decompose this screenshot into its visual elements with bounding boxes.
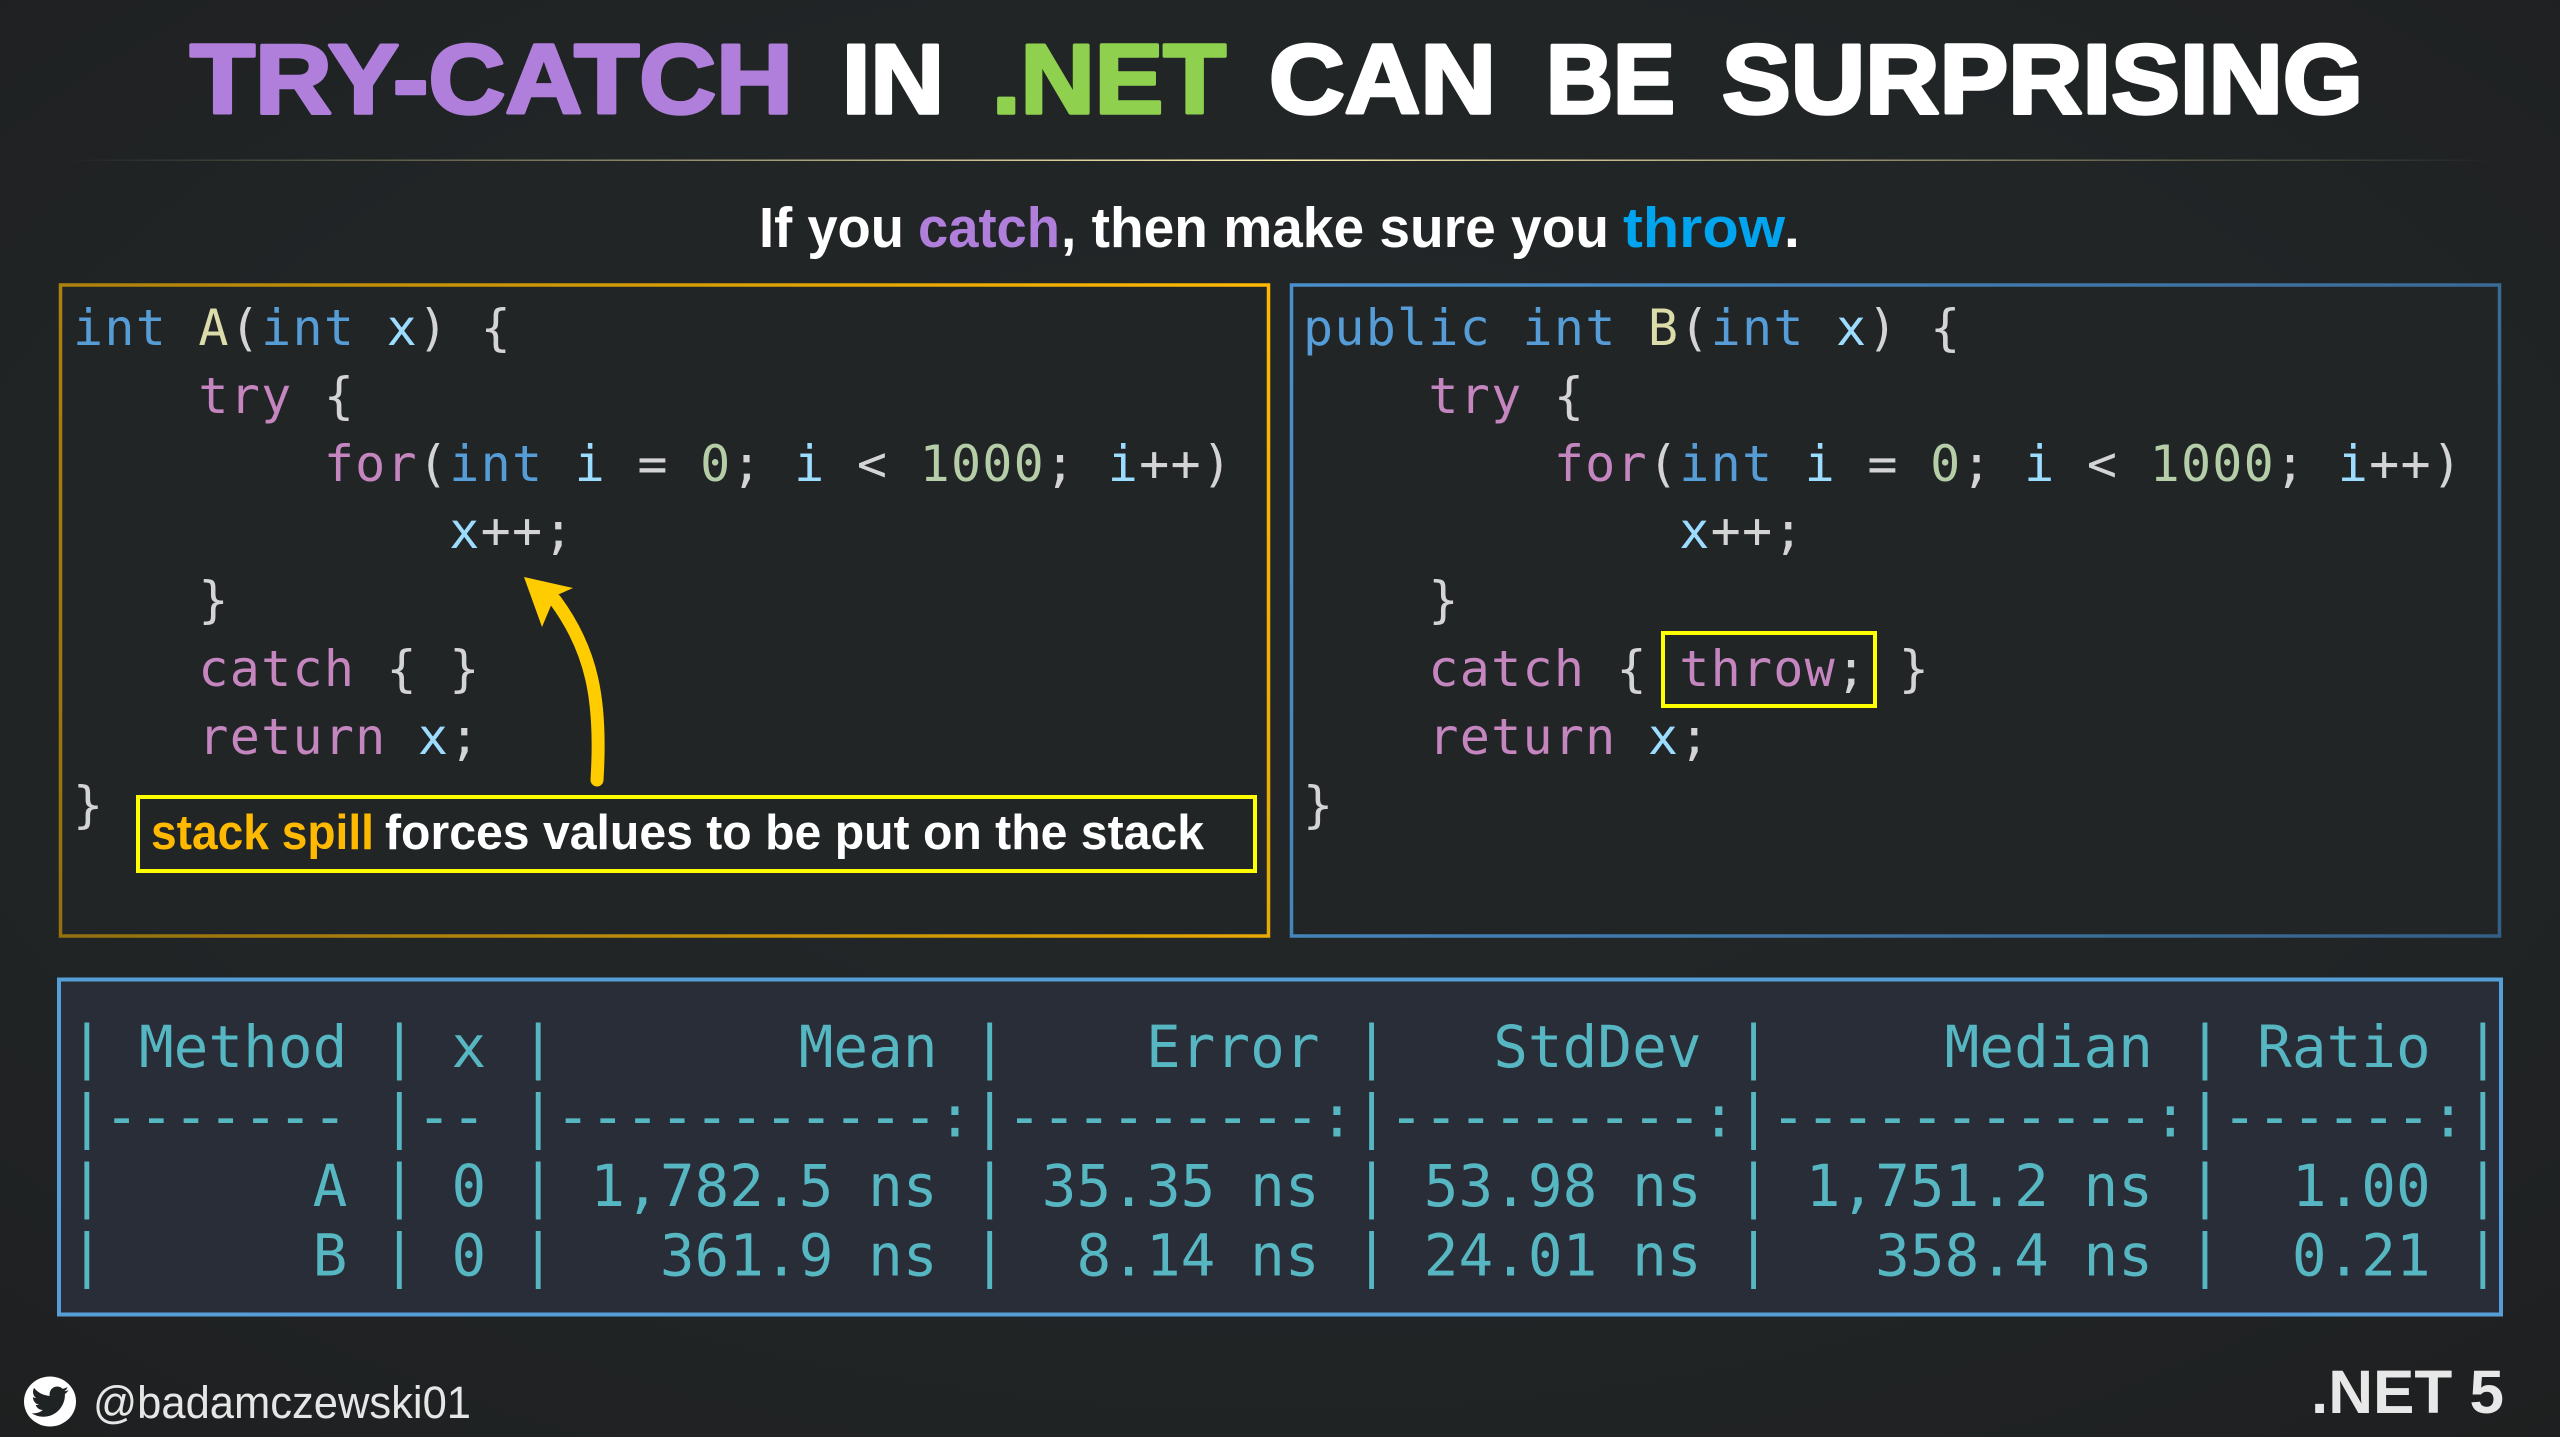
code listing A: x++; [73, 502, 575, 560]
subtitle: throw [1623, 196, 1786, 260]
subtitle [759, 196, 1800, 260]
code listing A: for(int i = 0; i < 1000; i++) [73, 435, 1233, 493]
callout: stack spill [138, 797, 1255, 871]
benchmark results text: | B | 0 | 361.9 ns | 8.14 ns | 24.01 ns | 358.4 ns | 0.21 | [70, 1223, 2500, 1290]
subtitle: If you [759, 196, 904, 260]
code listing A: } [73, 571, 230, 629]
author handle: @badamczewski01 [93, 1377, 471, 1428]
callout: stack spill: stack spill [151, 806, 374, 860]
arrow: stack spill to x++ [524, 577, 598, 780]
code listing B: try { [1303, 367, 1585, 425]
subtitle: . [1784, 196, 1800, 260]
code listing A: try { [73, 367, 355, 425]
highlight: throw box [1663, 633, 1875, 706]
subtitle: , then make sure you [1061, 196, 1609, 260]
version label: .NET 5 [2311, 1358, 2504, 1426]
code listing A: catch { } [73, 640, 481, 698]
benchmark results text: |------- |-- |-----------:|---------:|---------:|-----------:|------:| [70, 1084, 2500, 1150]
code listing B: return x; [1303, 708, 1711, 766]
code listing B: x++; [1303, 502, 1805, 560]
title [190, 24, 2363, 134]
code listing B: for(int i = 0; i < 1000; i++) [1303, 435, 2463, 493]
benchmark results text [70, 1014, 2500, 1290]
benchmark results text: | Method | x | Mean | Error | StdDev | Median | Ratio | [70, 1014, 2500, 1081]
panel: benchmark table [59, 980, 2501, 1314]
benchmark results text: | A | 0 | 1,782.5 ns | 35.35 ns | 53.98 ns | 1,751.2 ns | 1.00 | [70, 1153, 2500, 1220]
title: BE [1546, 24, 1675, 134]
panel: method B code [1292, 285, 2500, 936]
icon: twitter bird [24, 1376, 76, 1426]
code listing B: } [1303, 776, 1334, 834]
code listing B [1303, 299, 2463, 834]
code listing B: public int B(int x) { [1303, 299, 1961, 357]
callout: stack spill: forces values to be put on the stack [385, 806, 1205, 860]
code listing A: int A(int x) { [73, 299, 512, 357]
subtitle: catch [918, 196, 1060, 260]
title: SURPRISING [1722, 24, 2363, 134]
title: CAN [1269, 24, 1496, 134]
code listing B: catch { throw; } [1303, 640, 1930, 698]
code listing A: return x; [73, 708, 481, 766]
title: IN [842, 24, 944, 134]
code listing A: } [73, 776, 104, 834]
code listing A [73, 299, 1233, 834]
code listing B: } [1303, 571, 1460, 629]
title: .NET [992, 24, 1226, 134]
panel: method A code [60, 285, 1268, 936]
title: TRY-CATCH [190, 24, 793, 134]
